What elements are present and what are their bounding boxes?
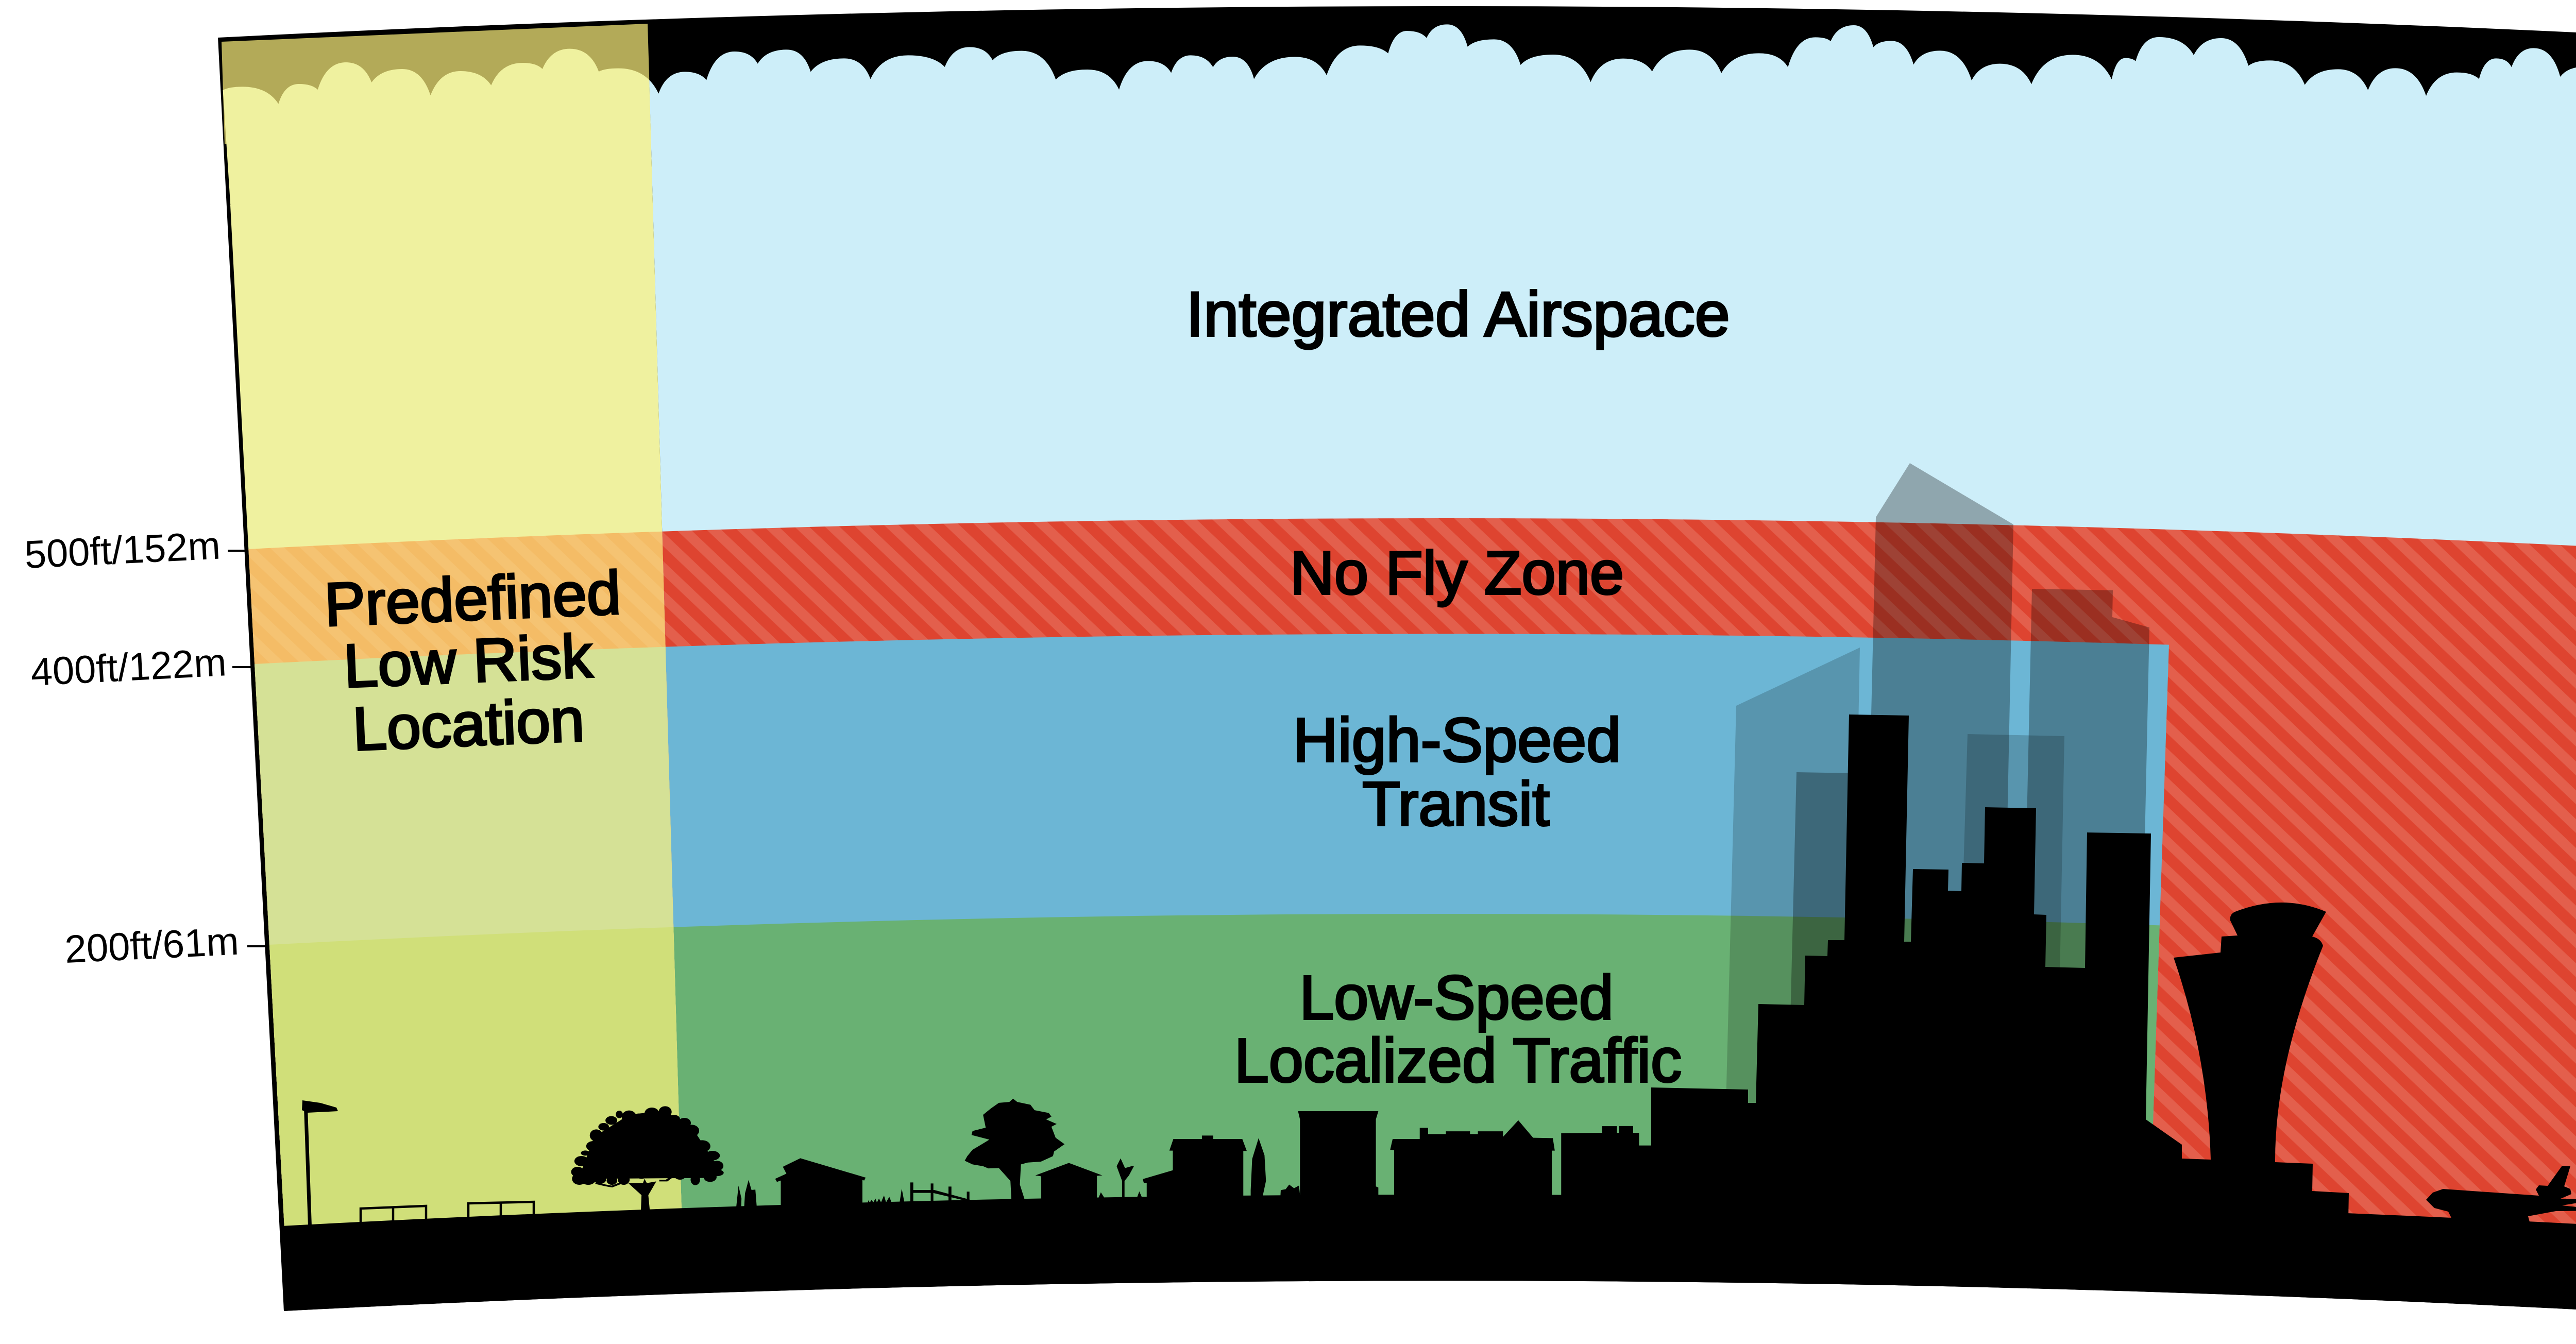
small house (1036, 1163, 1103, 1201)
tick 200ft left (247, 945, 266, 947)
line one: Low-Speed (1299, 963, 1614, 1032)
label: predefined low risk location (323, 558, 622, 763)
tree trunk (628, 1179, 656, 1210)
tower block (1298, 1111, 1378, 1199)
icon: large tree (571, 1106, 724, 1210)
bushes (1098, 1192, 1143, 1199)
label: low-speed localized traffic (1234, 963, 1682, 1095)
high-speed transit band (666, 634, 2169, 1203)
grass (868, 1196, 893, 1204)
line two: Localized Traffic (1234, 1026, 1682, 1095)
envelope tall centre (1865, 463, 2013, 979)
chimney building (1561, 1126, 1651, 1199)
left column orange hatched band (248, 532, 682, 1226)
left column yellow (223, 48, 682, 1224)
envelope small dark (1791, 772, 1848, 1005)
translucent buildings: building envelopes (1726, 463, 2149, 1103)
gabled building (1143, 1135, 1247, 1199)
tick 500ft left (228, 550, 246, 552)
left column: predefined low risk location (223, 48, 682, 1226)
line two: Transit (1362, 769, 1550, 839)
icon: second tree (964, 1099, 1064, 1201)
icon: field frames (361, 1202, 534, 1223)
no fly zone hatched region (662, 518, 2576, 1224)
label: high-speed transit (1293, 705, 1621, 839)
shrubs (736, 1180, 757, 1208)
left village silhouettes (736, 1158, 972, 1209)
city skyline and control tower (1651, 714, 2349, 1221)
frame two (468, 1202, 534, 1218)
sapling (1116, 1159, 1134, 1199)
tick 400ft left (232, 666, 251, 668)
wind sock flag (302, 1100, 338, 1113)
tall cypress (1251, 1138, 1266, 1199)
fence (910, 1182, 972, 1204)
line three: Location (351, 686, 586, 763)
icon: wind sock (302, 1100, 338, 1226)
tree branches (596, 1176, 672, 1186)
wind sock pole (304, 1108, 312, 1226)
low-speed traffic band (674, 914, 2160, 1209)
label 200ft left: 200ft/61m (64, 920, 240, 972)
line one: High-Speed (1293, 705, 1621, 775)
frame one (361, 1206, 426, 1223)
line one: Predefined (323, 558, 622, 639)
low shrub (1280, 1185, 1300, 1199)
spired building (1390, 1120, 1555, 1199)
left column pale green band (255, 647, 682, 1226)
envelope left (1726, 648, 1860, 1103)
label: integrated airspace: Integrated Airspace (1186, 279, 1730, 349)
ground (281, 1195, 2576, 1312)
label: no fly zone: No Fly Zone (1290, 539, 1624, 607)
town silhouettes (1036, 1111, 1651, 1201)
left altitude scale (24, 524, 266, 972)
line two: Low Risk (342, 622, 594, 701)
integrated airspace band (649, 24, 2576, 647)
tan sky strip over low risk location (222, 24, 651, 144)
icon: airplane (2426, 1166, 2576, 1222)
label 500ft left: 500ft/152m (24, 524, 222, 577)
small cypress (900, 1188, 905, 1204)
barn (775, 1158, 866, 1209)
left column yellow-green band (269, 927, 682, 1226)
envelope middle (1958, 734, 2064, 1056)
envelope right (2022, 589, 2149, 1030)
label 400ft left: 400ft/122m (29, 640, 228, 694)
